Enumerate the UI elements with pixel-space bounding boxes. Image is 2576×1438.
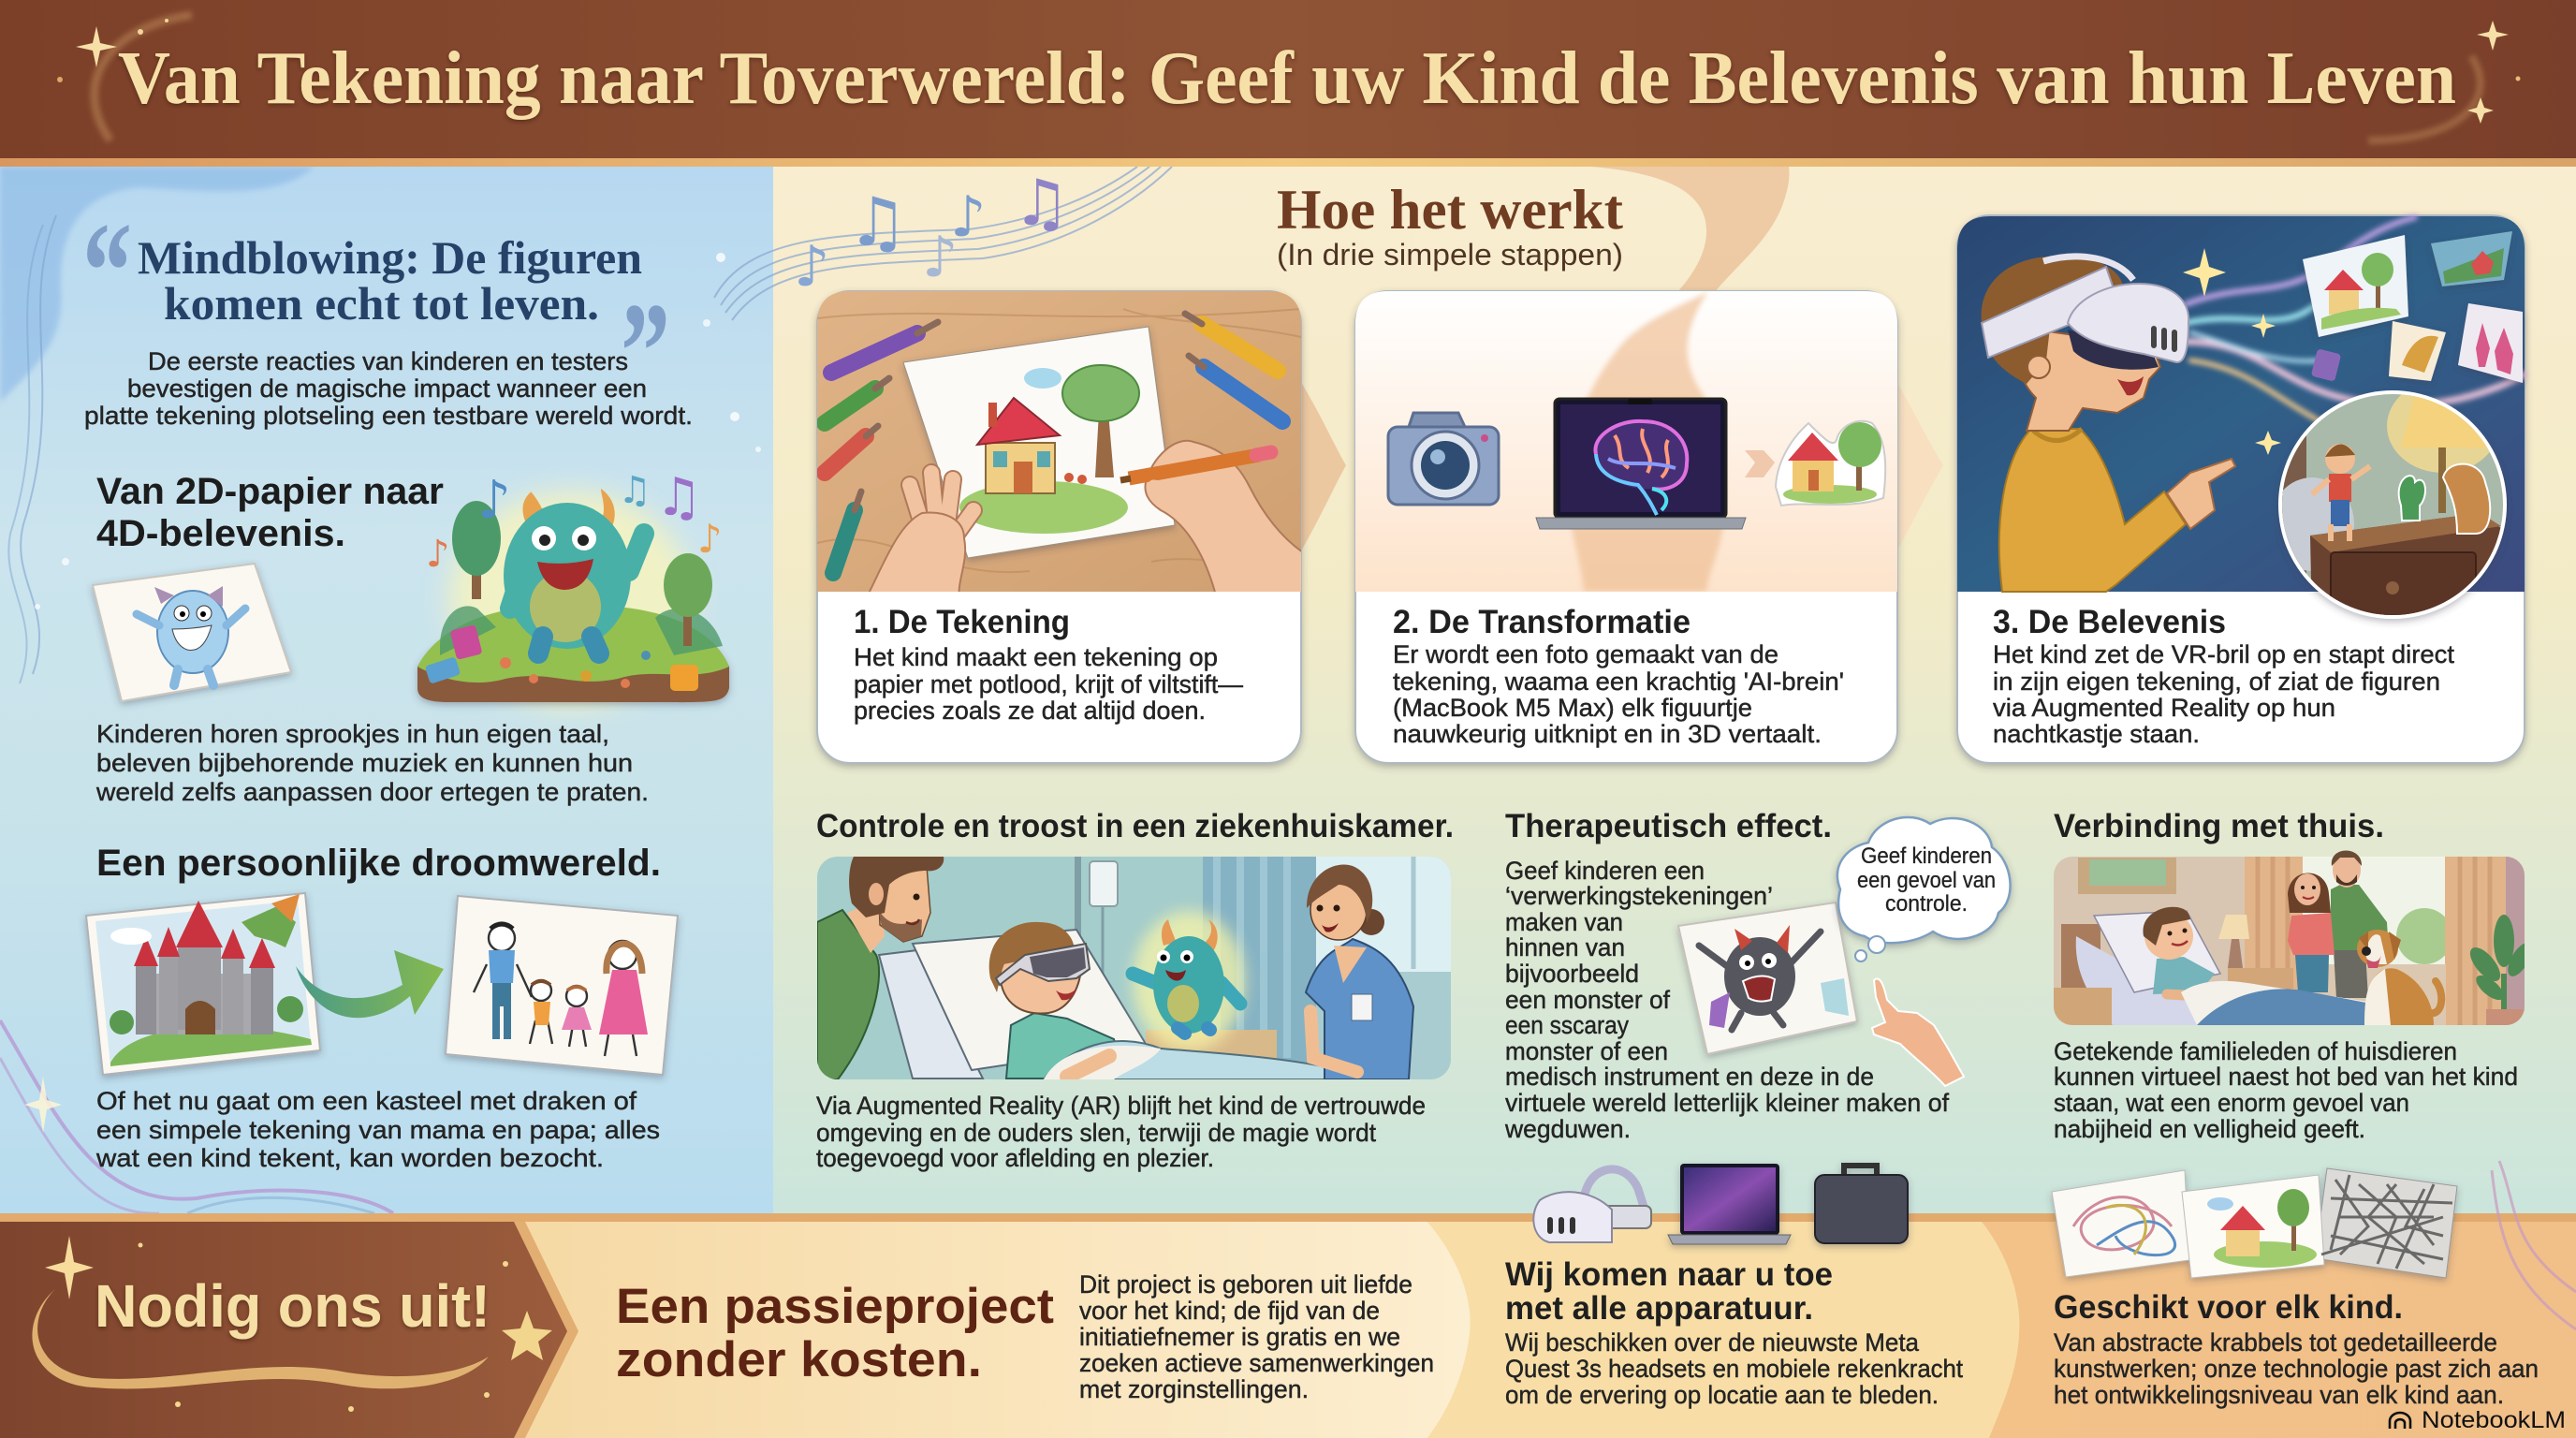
music notes: ♪	[794, 234, 829, 300]
cloud text	[1857, 844, 1996, 917]
table	[1146, 1030, 1277, 1062]
music notes: ♫	[618, 469, 651, 512]
invite text: Nodig ons uit!	[95, 1272, 490, 1340]
AR monster	[2399, 476, 2425, 521]
heading: 2D to 4D	[96, 471, 444, 554]
music notes: ♪	[477, 470, 511, 531]
music notes: ♪	[922, 225, 958, 290]
text: step 3: Het kind zet de VR-bril op en stapt direct	[1993, 640, 2455, 668]
music notes	[794, 167, 1070, 300]
text: equipment: Wij beschikken over de nieuwste Meta	[1505, 1328, 1920, 1357]
illustration: castle drawing	[86, 893, 320, 1075]
music notes: ♫	[1013, 167, 1070, 241]
text: therapeutic body: bijvoorbeeld	[1505, 960, 1639, 988]
text: step 2: 2. De Transformatie	[1393, 604, 1690, 640]
logo: NotebookLM: NotebookLM	[2422, 1407, 2566, 1433]
face	[2017, 328, 2160, 431]
sparkle arc right	[2368, 21, 2520, 140]
peach ribbon	[1567, 167, 1790, 599]
text: suited for every child: kunstwerken; onze technologie past zich aan	[2054, 1355, 2539, 1383]
text: therapeutic body: monster of een	[1505, 1037, 1668, 1065]
dog	[2357, 930, 2441, 1025]
boy body	[1999, 429, 2186, 592]
quote marks: “	[82, 194, 132, 349]
music notes: ♪	[426, 533, 450, 576]
text: step 1: 1. De Tekening	[854, 604, 1070, 640]
bed	[2061, 924, 2100, 990]
family	[2288, 873, 2389, 998]
text: step 1: precies zoals ze dat altijd doen.	[854, 697, 1206, 725]
text: AR	[816, 1092, 1426, 1172]
text: family	[2054, 1037, 2518, 1143]
decorative watercolor swirl	[0, 167, 761, 1213]
brain	[1595, 421, 1687, 515]
heading: suited for every child: Geschikt voor elk kind.	[2054, 1289, 2403, 1326]
section: free passion project	[515, 1222, 1471, 1438]
illustration: hand drawing with crayons	[817, 291, 1303, 599]
heading: how it works: (In drie simpele stappen)	[1277, 238, 1623, 271]
panel: left blue column	[0, 167, 773, 1213]
heading: 2D to 4D: Van 2D-papier naar	[96, 471, 444, 512]
icon: camera	[1388, 413, 1499, 505]
heading: how it works: Hoe het werkt	[1277, 179, 1623, 241]
heading: dream world: Een persoonlijke droomwereld.	[96, 843, 661, 884]
text: therapeutic body: Geef kinderen een	[1505, 857, 1705, 885]
text block: fairy tales: beleven bijbehorende muziek en kunnen hun	[96, 749, 633, 777]
panel: step 1	[817, 291, 1346, 763]
text: family: kunnen virtueel naest hot bed van het kind	[2054, 1063, 2518, 1091]
text: suited for every child: Van abstracte krabbels tot gedetailleerde	[2054, 1328, 2497, 1357]
heading: 2D to 4D: 4D-belevenis.	[96, 513, 345, 554]
heading: equipment	[1505, 1256, 1833, 1327]
panel: therapeutic effect	[1504, 808, 2011, 1143]
icon: paper monster drawing	[93, 564, 291, 701]
nurse	[1306, 864, 1413, 1079]
callout arrow: invite us	[0, 1222, 578, 1438]
gold swoosh	[32, 1288, 489, 1388]
text: step 2: nauwkeurig uitknipt en in 3D vertaalt.	[1393, 720, 1822, 748]
heading: therapeutic: Therapeutisch effect.	[1505, 808, 1832, 844]
illustration: hospital room	[817, 857, 1451, 1079]
text: therapeutic body: ‘verwerkingstekeningen’	[1505, 882, 1773, 910]
heading: how it works	[1277, 179, 1623, 271]
thought cloud	[1837, 817, 2011, 961]
arrow: step 2 to 3	[1893, 374, 1943, 559]
text: step 3: via Augmented Reality op hun	[1993, 694, 2335, 722]
text: AR: Via Augmented Reality (AR) blijft het kind de vertrouwde	[816, 1092, 1426, 1120]
boy	[2153, 957, 2215, 994]
text: family: Getekende familieleden of huisdieren	[2054, 1037, 2457, 1065]
sparkle arc left	[57, 15, 192, 140]
panel: hospital control	[816, 808, 1454, 1172]
text: step 2: (MacBook M5 Max) elk figuurtje	[1393, 694, 1752, 722]
IV bag	[1090, 861, 1118, 906]
illustration: family drawing	[446, 896, 678, 1075]
text: suited for every child	[2054, 1328, 2539, 1409]
illustration: three drawings	[2052, 1168, 2457, 1278]
text: step 1: Het kind maakt een tekening op	[854, 643, 1218, 671]
text: step 3: in zijn eigen tekening, of ziat de figuren	[1993, 668, 2440, 696]
text: passion project: voor het kind; de fijd van de	[1079, 1297, 1380, 1325]
text block: castle or parents: Of het nu gaat om een kasteel met draken of	[96, 1087, 637, 1115]
heading: hospital: Controle en troost in een ziekenhuiskamer.	[816, 808, 1454, 844]
headset	[1982, 257, 2188, 370]
text: therapeutic body: een monster of	[1505, 986, 1670, 1014]
music notes: ♫	[847, 183, 908, 261]
text: family: nabijheid en velligheid geeft.	[2054, 1115, 2365, 1143]
heading: equipment: Wij komen naar u toe	[1505, 1256, 1833, 1293]
panel: step 2	[1355, 291, 1943, 763]
text: step 3	[1993, 604, 2455, 748]
text: therapeutic body: hinnen van	[1505, 933, 1625, 961]
text: AR: toegevoegd voor aflelding en plezier.	[816, 1144, 1214, 1172]
bed and pillow	[879, 950, 983, 1078]
cloud text: Geef kinderen	[1861, 844, 1992, 869]
text: therapeutic body: virtuele wereld letterlijk kleiner maken of	[1505, 1089, 1949, 1117]
decorative right swirl	[2492, 1161, 2576, 1329]
right hand	[1145, 441, 1303, 599]
quote marks	[82, 194, 670, 430]
heading: passion project: Een passieproject	[616, 1279, 1054, 1334]
music notes: ♪	[950, 184, 986, 250]
text: step 2	[1393, 604, 1844, 748]
text: passion project: initiatiefnemer is gratis en we	[1079, 1323, 1400, 1351]
music staff	[714, 167, 1172, 320]
small arrow	[1745, 450, 1775, 477]
quote marks: ”	[621, 274, 670, 430]
text block: fairy tales	[95, 720, 649, 806]
heading: home: Verbinding met thuis.	[2054, 808, 2384, 844]
text: equipment: Quest 3s headsets en mobiele rekenkracht	[1505, 1355, 1963, 1383]
music notes: ♪	[697, 516, 723, 562]
text: family: staan, wat een enorm gevoel van	[2054, 1089, 2409, 1117]
sparkles	[2183, 248, 2281, 455]
text: step 2: Er wordt een foto gemaakt van de	[1393, 640, 1778, 668]
illustration: monster drawing	[1678, 902, 1857, 1054]
monster	[522, 489, 615, 534]
cloud text: een gevoel van	[1857, 868, 1996, 893]
inset: AR figures on nightstand	[2270, 379, 2509, 627]
text block: fairy tales: Kinderen horen sprookjes in hun eigen taal,	[96, 720, 609, 748]
panel: step 3	[1957, 215, 2525, 763]
icon: VR headset	[1533, 1169, 1651, 1242]
text: therapeutic body	[1504, 857, 1949, 1143]
text block: castle or parents	[95, 1087, 660, 1172]
text: step 1: papier met potlood, krijt of viltstift—	[854, 670, 1243, 698]
music notes	[426, 467, 723, 576]
text: passion project	[1079, 1270, 1434, 1403]
heading: mindblowing: komen echt tot leven.	[164, 277, 599, 330]
heading: mindblowing	[138, 231, 642, 330]
father head over frame	[2332, 850, 2362, 888]
text: equipment: om de ervering op locatie aan te bleden.	[1505, 1381, 1939, 1409]
text block: first reactions	[84, 347, 693, 430]
panel: bottom band	[0, 1161, 2576, 1438]
section: equipment	[1427, 1222, 2019, 1438]
illustration: transformation	[1355, 291, 1897, 592]
text: step 1	[854, 604, 1243, 725]
text: therapeutic body: wegduwen.	[1504, 1115, 1631, 1143]
text: therapeutic body: een sscaray	[1505, 1011, 1629, 1039]
panel: right cream column	[714, 167, 2576, 1213]
text: suited for every child: het ontwikkelingsniveau van elk kind aan.	[2054, 1381, 2504, 1409]
icon: carrying case	[1815, 1166, 1908, 1243]
text: step 3: nachtkastje staan.	[1993, 720, 2200, 748]
illustration: boy with VR headset	[1957, 216, 2525, 627]
crayon in hand	[1120, 446, 1279, 485]
heading: passion project: zonder kosten.	[616, 1332, 982, 1387]
blanket	[1044, 1041, 1376, 1079]
title: Van Tekening naar Toverwereld: Geef uw Kind de Belevenis van hun Leven	[118, 37, 2456, 120]
text: step 3: 3. De Belevenis	[1993, 604, 2226, 640]
hair	[1982, 257, 2123, 384]
text: equipment	[1505, 1328, 1963, 1409]
text block: first reactions: De eerste reacties van kinderen en testers	[148, 347, 628, 375]
cloud text: controle.	[1885, 891, 1968, 917]
illustration: bedroom family	[2054, 850, 2537, 1025]
blanket	[2181, 981, 2368, 1025]
text block: first reactions: platte tekening plotseling een testbare wereld wordt.	[84, 402, 693, 430]
magic ribbons	[2186, 217, 2525, 440]
text: passion project: met zorginstellingen.	[1079, 1375, 1309, 1403]
text block: first reactions: bevestigen de magische impact wanneer een	[127, 374, 647, 403]
arrow: step 1 to 2	[1296, 374, 1346, 559]
music notes: ♫	[655, 467, 702, 528]
text: step 2: tekening, waama een krachtig 'AI-brein'	[1393, 668, 1844, 696]
father	[817, 857, 944, 1079]
text: therapeutic body: maken van	[1505, 908, 1623, 936]
icon: laptop with AI brain	[1536, 399, 1746, 529]
icon: laptop	[1668, 1164, 1791, 1244]
AR dog	[2443, 464, 2490, 534]
plant	[2465, 915, 2537, 1025]
icons: equipment	[1533, 1164, 1908, 1244]
icon: cutout house	[1776, 421, 1885, 506]
text block: castle or parents: wat een kind tekent, kan worden bezocht.	[95, 1144, 604, 1172]
left hand	[866, 473, 973, 599]
heading: passion project	[616, 1279, 1054, 1387]
text: AR: omgeving en de ouders slen, terwiji de magie wordt	[816, 1119, 1376, 1147]
AR boy	[2325, 444, 2355, 474]
boy in bed	[989, 922, 1123, 1078]
text: therapeutic body: medisch instrument en deze in de	[1505, 1063, 1874, 1091]
text: passion project: zoeken actieve samenwerkingen	[1079, 1349, 1434, 1377]
heading: mindblowing: Mindblowing: De figuren	[138, 231, 642, 284]
island	[417, 612, 729, 702]
text block: fairy tales: wereld zelfs aanpassen door ertegen te praten.	[95, 778, 649, 806]
glow monster	[1133, 911, 1245, 1051]
icon: pointing hand	[1872, 979, 1964, 1086]
illustration: living monster on island	[417, 467, 729, 707]
arrow: green curved	[296, 950, 444, 1018]
lamp	[2218, 915, 2249, 939]
panel: connection with home	[2054, 808, 2537, 1143]
text block: castle or parents: een simpele tekening van mama en papa; alles	[96, 1116, 660, 1144]
floating drawings	[2303, 231, 2523, 383]
heading: equipment: met alle apparatuur.	[1505, 1290, 1813, 1327]
header banner	[0, 0, 2576, 168]
text: passion project: Dit project is geboren uit liefde	[1079, 1270, 1412, 1299]
